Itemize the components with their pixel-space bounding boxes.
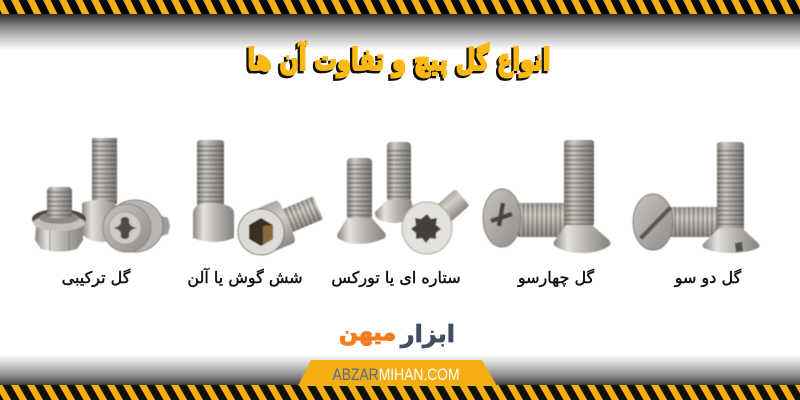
logo: ابزار (400, 320, 455, 348)
label: torx: ستاره ای یا تورکس (331, 268, 461, 288)
bolts: torx (337, 142, 470, 254)
bottom hazard band (0, 355, 800, 400)
title: انواع گل پیچ و تفاوت آن ها (246, 43, 548, 80)
label: slotted: گل دو سو (674, 268, 742, 288)
bolts: combination (32, 138, 170, 252)
bolts: hex socket (193, 140, 327, 255)
logo: میهن (339, 321, 396, 346)
label: combination: گل ترکیبی (62, 268, 131, 288)
label: phillips: گل چهارسو (517, 268, 595, 288)
title: انواع گل پیچ و تفاوت آن ها (248, 41, 550, 78)
label: hex socket: شش گوش یا آلن (187, 268, 303, 288)
top hazard band (0, 0, 800, 50)
logo (339, 320, 455, 348)
title (246, 41, 550, 80)
bolts: slotted (633, 142, 760, 253)
website badge: ABZARMIHAN.COM (332, 366, 460, 384)
website badge (298, 360, 497, 386)
bolts: phillips (483, 140, 610, 253)
